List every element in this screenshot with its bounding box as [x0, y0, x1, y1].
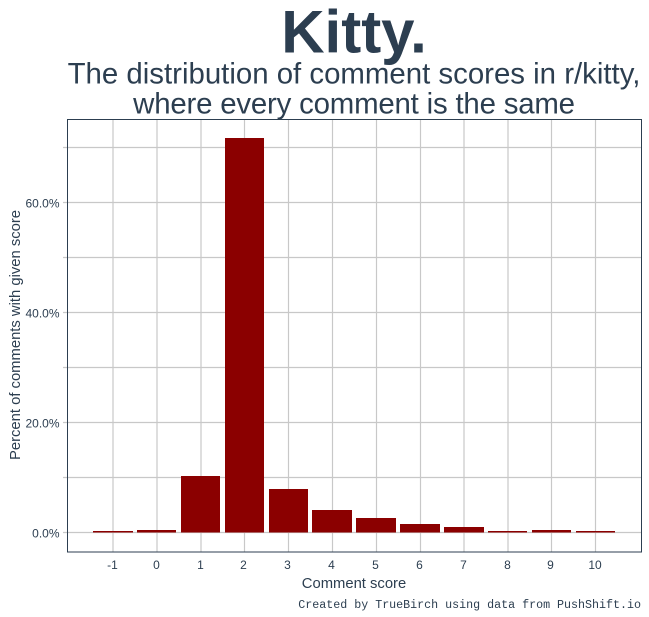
y axis tick labels: 40.0% — [25, 306, 60, 320]
x axis tick labels: 1 — [197, 558, 204, 572]
x axis tick labels: 9 — [547, 558, 554, 572]
plot border — [68, 120, 642, 552]
x axis tick labels — [107, 558, 602, 572]
y axis tick labels: 60.0% — [25, 196, 60, 210]
title: Kitty. — [281, 0, 427, 66]
x axis tick labels: 8 — [504, 558, 511, 572]
x axis tick labels: 3 — [284, 558, 291, 572]
y axis tick labels: 0.0% — [32, 526, 60, 540]
y axis title: Percent of comments with given score — [8, 210, 24, 460]
x axis tick labels: 10 — [588, 558, 602, 572]
x axis tick labels: 6 — [416, 558, 423, 572]
x axis tick labels: -1 — [107, 558, 118, 572]
bars — [93, 138, 615, 532]
bar chart — [25, 119, 642, 572]
x axis title: Comment score — [302, 576, 406, 592]
y axis tick labels: 20.0% — [25, 416, 60, 430]
y axis tick labels — [25, 196, 60, 540]
x axis tick labels: 7 — [460, 558, 467, 572]
x axis tick labels: 2 — [240, 558, 247, 572]
caption: Created by TrueBirch using data from PushShift.io — [298, 598, 641, 612]
subtitle: where every comment is the same — [132, 88, 575, 120]
subtitle: The distribution of comment scores in r/kitty, — [68, 58, 640, 90]
x axis tick labels: 4 — [328, 558, 335, 572]
subtitle — [68, 58, 640, 120]
x axis tick labels: 5 — [372, 558, 379, 572]
x axis tick labels: 0 — [153, 558, 160, 572]
